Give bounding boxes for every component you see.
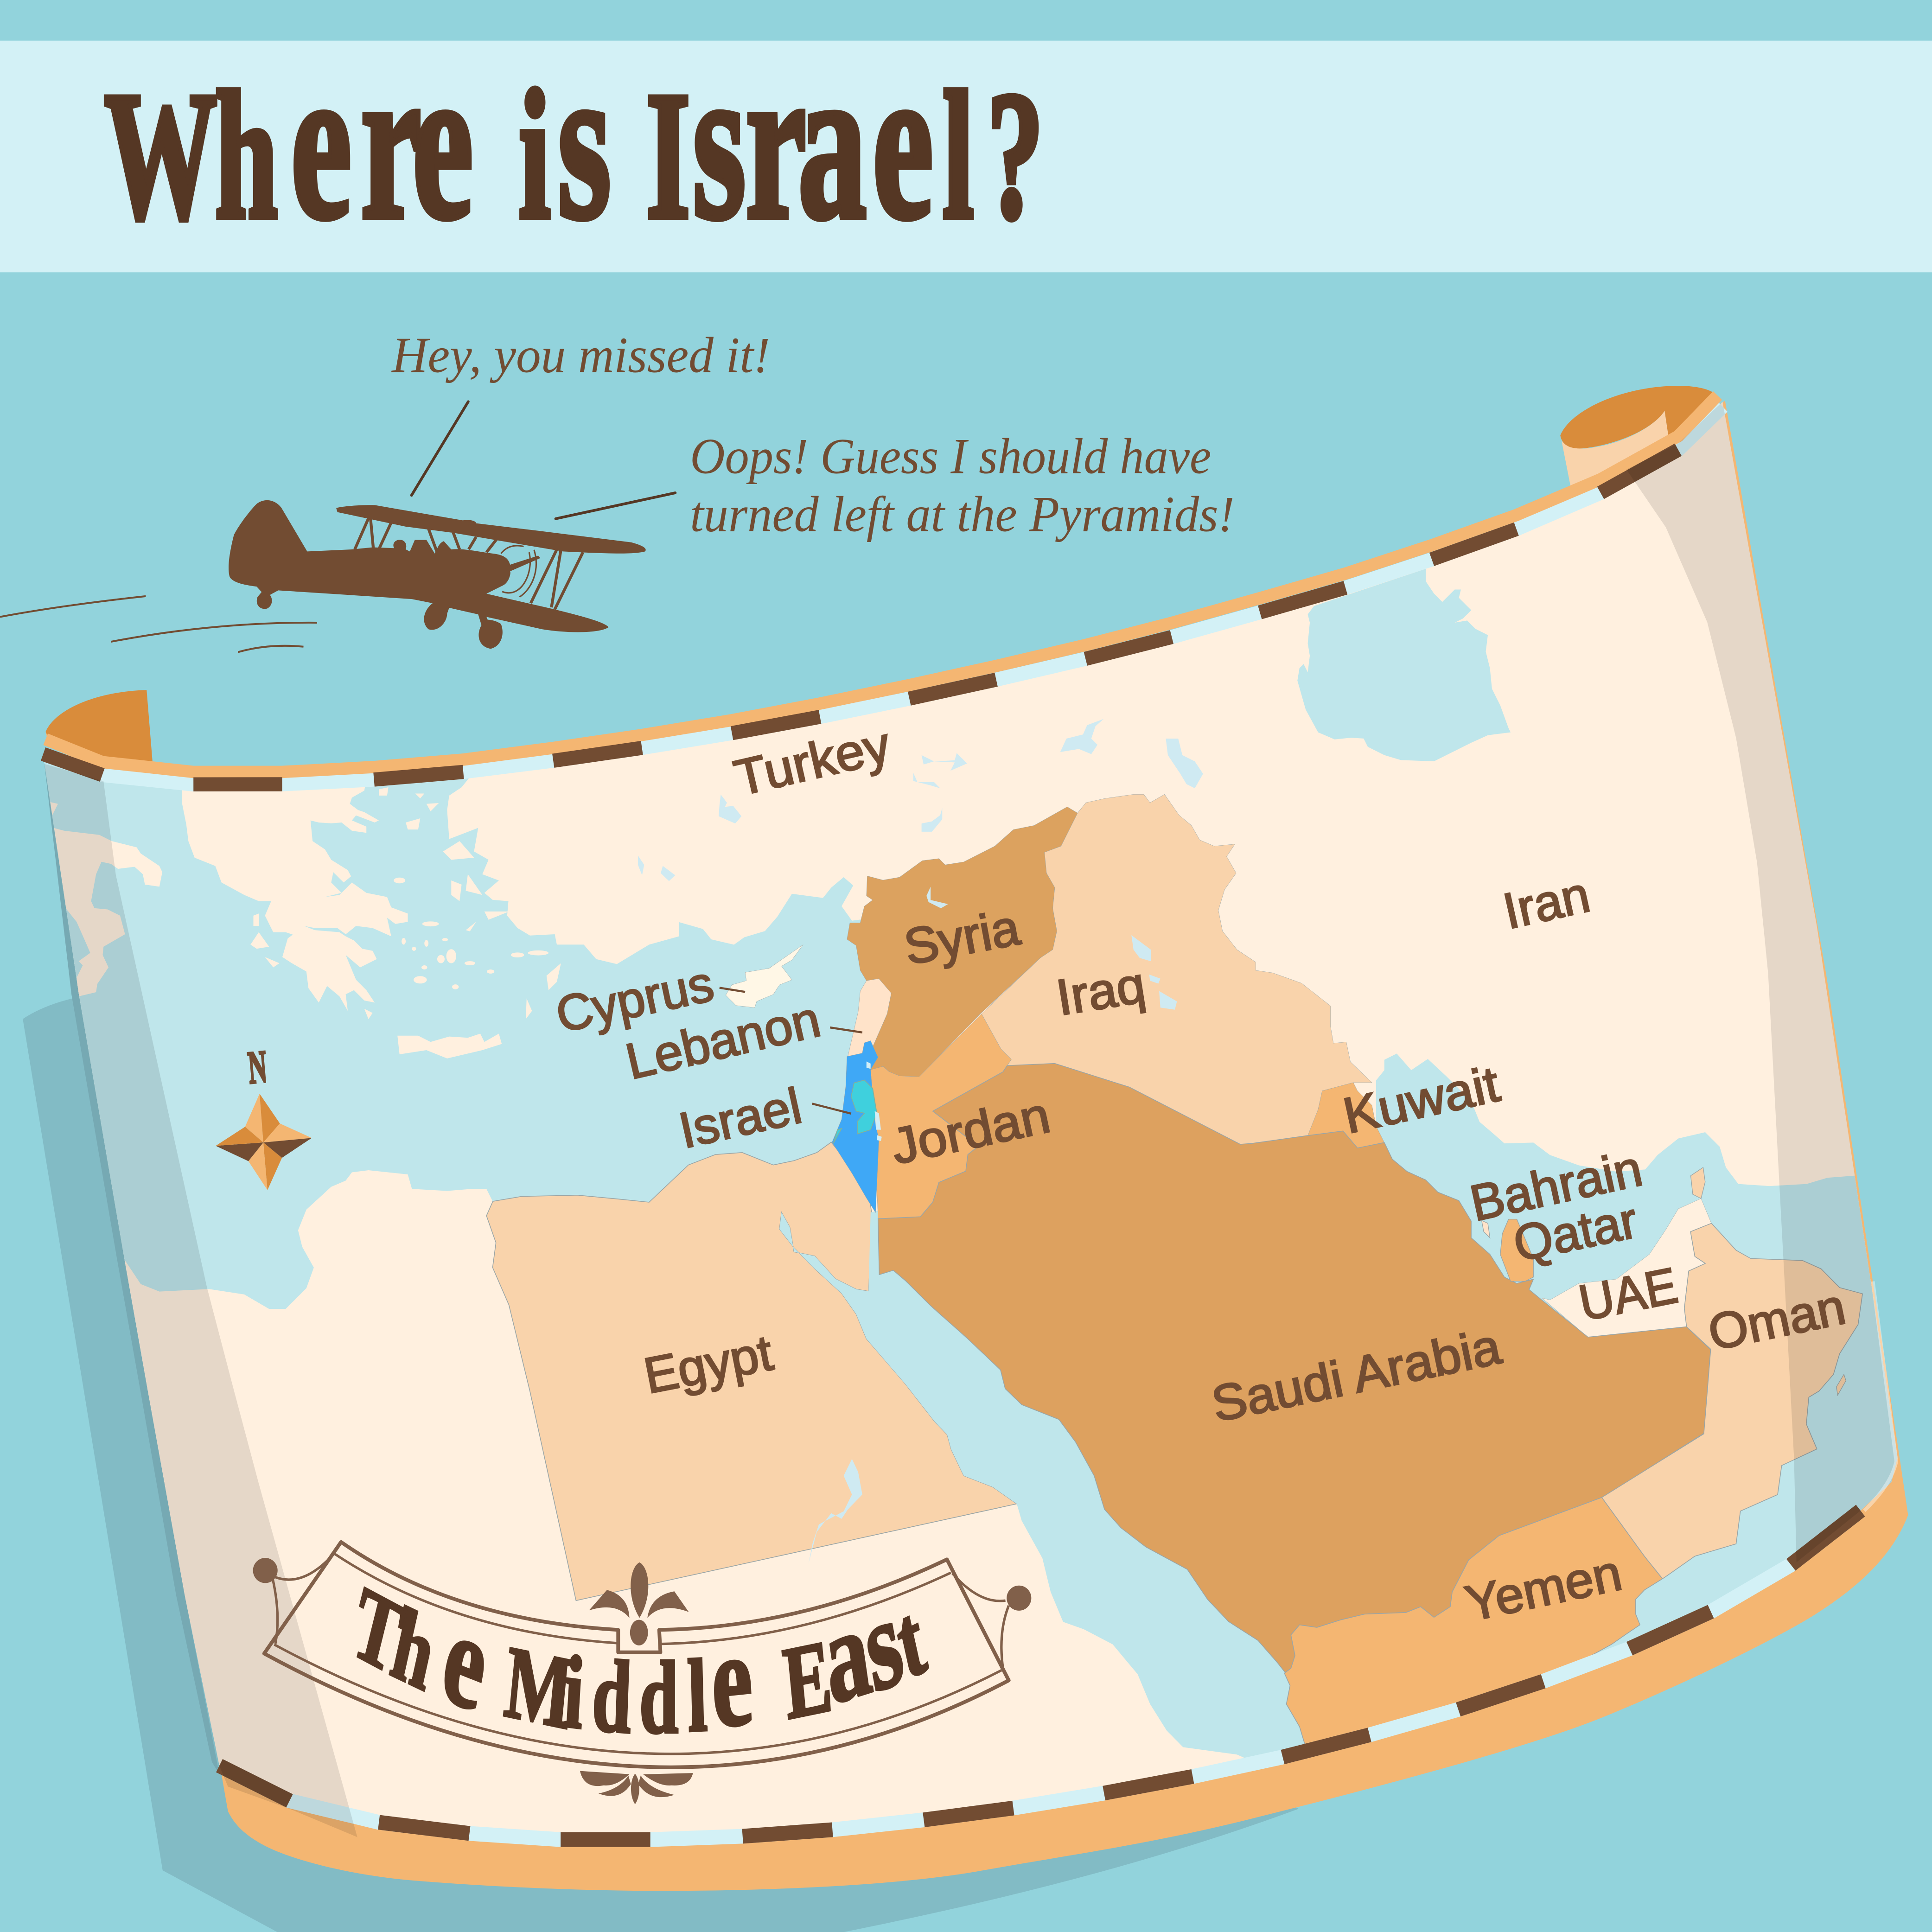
speech: hey you missed it: Hey, you missed it!	[391, 327, 770, 383]
banner frame	[264, 1542, 1009, 1767]
lakes in turkey	[638, 719, 1203, 881]
label: Syria: Syria	[900, 899, 1024, 976]
jordan	[871, 1014, 1011, 1219]
bottom scroll roll	[219, 401, 1908, 1891]
bottom map border: light stripe	[219, 1511, 1861, 1840]
motion lines	[0, 596, 317, 652]
egypt	[486, 1142, 1017, 1600]
gaza	[833, 1129, 842, 1143]
lakes in syria and iraq	[926, 887, 1177, 1010]
land: north africa	[124, 1170, 538, 1735]
label: Turkey: Turkey	[729, 716, 896, 807]
land: balkans, turkey, italy, islands	[50, 755, 679, 1058]
label: Qatar: Qatar	[1509, 1192, 1642, 1273]
speech: oops guess I should have: Oops! Guess I should have	[690, 428, 1211, 484]
north letter: N	[246, 1041, 269, 1094]
label: Saudi Arabia: Saudi Arabia	[1207, 1318, 1506, 1433]
top map border: dark dashes	[43, 450, 1678, 784]
label: Oman: Oman	[1703, 1278, 1850, 1361]
label: Cyprus: Cyprus	[551, 955, 718, 1043]
label: Yemen: Yemen	[1460, 1544, 1626, 1632]
right fold shade	[1626, 402, 1898, 1562]
bottom fleur ornament	[580, 1771, 693, 1804]
sea of galilee	[867, 1061, 871, 1069]
left paper edge	[45, 764, 219, 1774]
israel	[832, 1041, 879, 1212]
compass star	[216, 1094, 312, 1190]
lebanon	[848, 979, 891, 1057]
caspian sea	[1297, 569, 1511, 761]
label: Egypt: Egypt	[639, 1324, 777, 1404]
banner text: The Middle East	[343, 1565, 934, 1757]
speech: turned left at the pyramids: turned left at the Pyramids!	[690, 486, 1235, 542]
land: turkey south coast	[679, 710, 896, 945]
bottom map border: dark dashes	[219, 1511, 1861, 1840]
syria	[847, 807, 1078, 1077]
banner knobs	[253, 1558, 1031, 1611]
persian gulf and arabian sea	[1376, 1053, 1932, 1714]
israel and neighbours detail	[726, 945, 891, 1212]
country leader lines	[720, 988, 862, 1114]
uae	[1542, 1199, 1711, 1337]
label: Kuwait: Kuwait	[1338, 1056, 1505, 1144]
paper shadow	[23, 998, 1299, 1932]
gulf details: qatar, bahrain, musandam, masirah	[1482, 1167, 1846, 1395]
top map border: orange edge	[45, 395, 1718, 772]
oman	[1602, 1223, 1862, 1579]
top banner	[0, 41, 1932, 272]
speech leader lines	[412, 402, 675, 519]
red sea	[779, 1211, 1319, 1774]
title: Where is Israel?	[104, 19, 1044, 265]
mediterranean sea	[45, 762, 866, 1349]
saudi arabia	[878, 1064, 1710, 1673]
label: Israel: Israel	[674, 1078, 807, 1159]
kuwait	[1308, 1083, 1384, 1148]
lake nasser	[809, 1459, 862, 1564]
cyprus	[726, 945, 803, 1007]
left fold shade	[45, 764, 357, 1837]
right fold highlight	[1864, 1282, 1896, 1511]
label: Bahrain: Bahrain	[1465, 1140, 1647, 1232]
label: Lebanon: Lebanon	[621, 991, 825, 1090]
map title banner	[253, 1542, 1031, 1804]
label: UAE: UAE	[1575, 1257, 1682, 1332]
west bank	[851, 1080, 877, 1134]
top map border: light stripe	[43, 407, 1722, 784]
yemen	[1284, 1498, 1663, 1756]
iraq	[982, 794, 1372, 1144]
label: Iran: Iran	[1498, 866, 1595, 940]
label: Iraq: Iraq	[1052, 956, 1149, 1027]
label: Jordan: Jordan	[886, 1087, 1055, 1175]
left scroll roll cap	[45, 690, 153, 772]
top fleur ornament	[589, 1562, 689, 1645]
dead sea	[875, 1111, 882, 1141]
compass rose	[216, 1041, 312, 1190]
icon: biplane silhouette	[229, 500, 646, 649]
panel: map sheet	[45, 402, 1897, 1832]
right scroll roll	[1560, 386, 1716, 491]
